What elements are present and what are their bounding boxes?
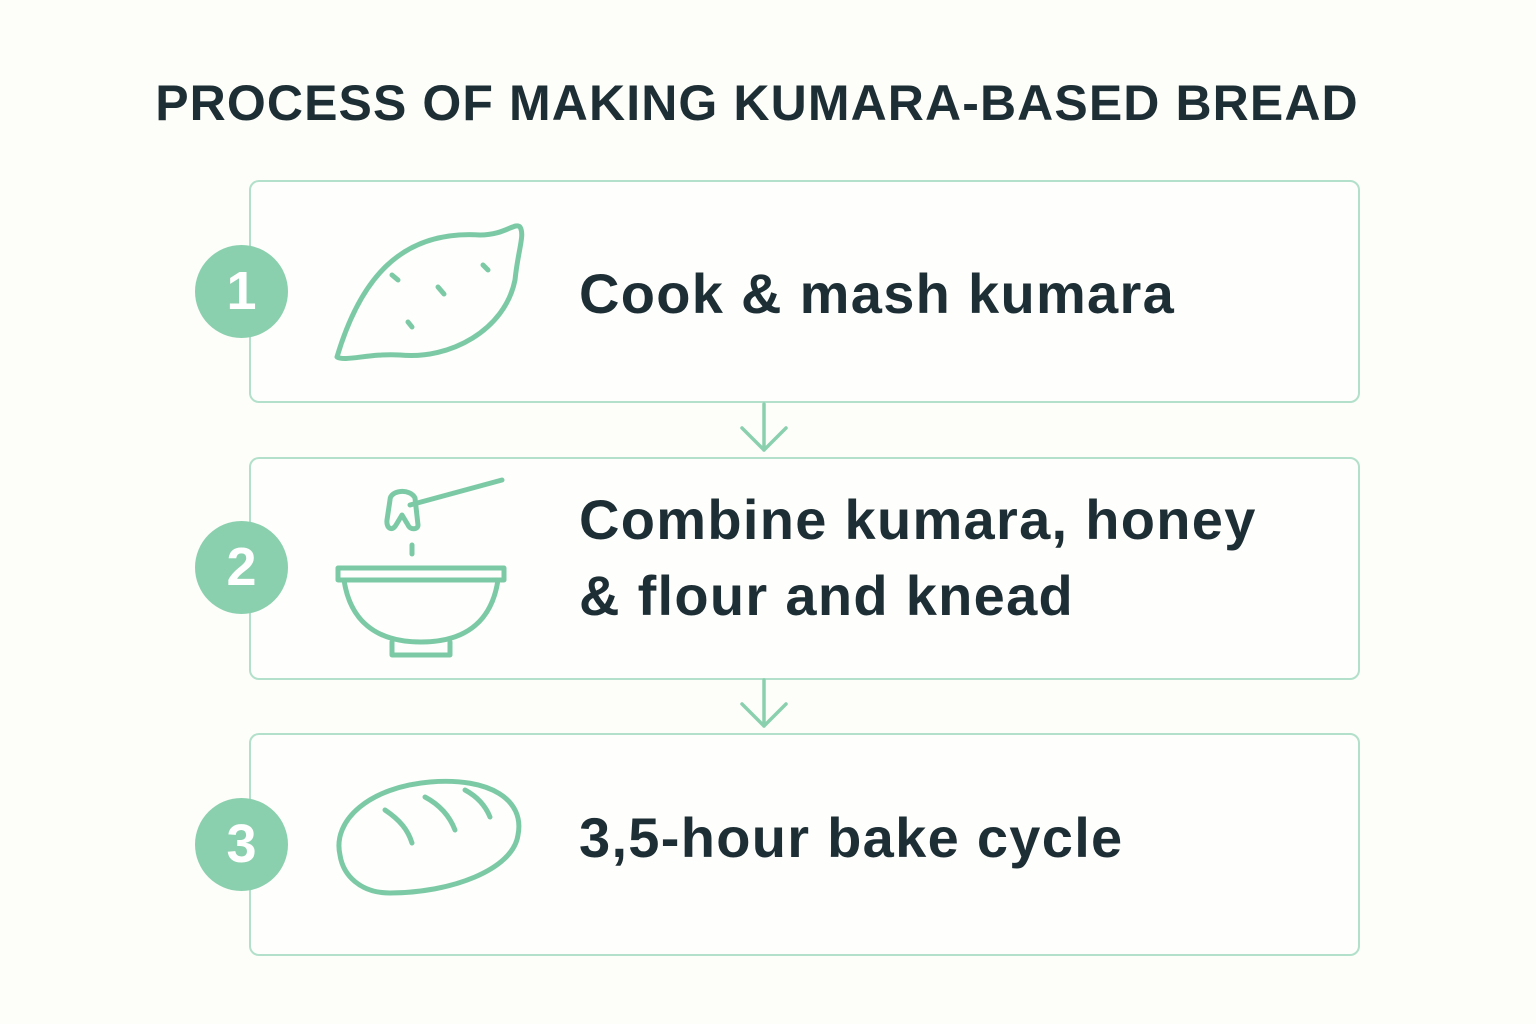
number 3: 3 (226, 814, 257, 874)
step 2 text: Combine kumara, honey (579, 488, 1257, 551)
title: PROCESS OF MAKING KUMARA-BASED BREAD (155, 75, 1359, 131)
icon: kumara (334, 223, 524, 361)
number 2: 2 (226, 537, 257, 597)
panel: step 2 (249, 457, 1360, 680)
number 1 (195, 245, 288, 338)
number 3 (195, 798, 288, 891)
panel: step 3 (249, 733, 1360, 956)
icon: bread loaf (336, 778, 522, 896)
step 3 text: 3,5-hour bake cycle (579, 806, 1124, 869)
number 2 (195, 521, 288, 614)
panel: step 1 (249, 180, 1360, 403)
step 2 text: & flour and knead (579, 564, 1074, 627)
icon: bowl with honey dipper (336, 478, 506, 658)
number 1: 1 (226, 261, 257, 321)
step 1 text: Cook & mash kumara (579, 262, 1175, 325)
step 2 text (579, 488, 1257, 627)
